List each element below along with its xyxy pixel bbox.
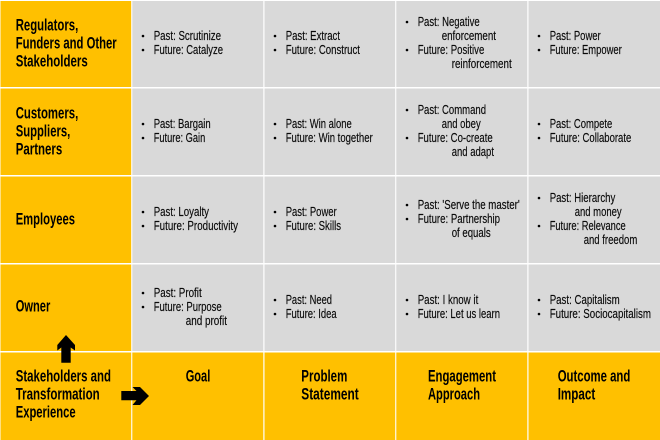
row header: customers: Customers, bbox=[16, 105, 78, 123]
cell: regulators goal bbox=[132, 1, 263, 87]
cell: regulators goal: Future: Catalyze bbox=[154, 42, 223, 57]
cell: employees problem statement: Future: Skills bbox=[286, 218, 341, 233]
cell: owner engagement bbox=[396, 264, 527, 351]
cell: regulators engagement: enforcement bbox=[442, 28, 496, 43]
cell: regulators goal: Past: Scrutinize bbox=[154, 28, 221, 43]
cell: employees outcome: Future: Relevance bbox=[550, 218, 626, 233]
row header: regulators: Regulators, bbox=[16, 17, 78, 35]
row header: regulators: Funders and Other bbox=[16, 35, 117, 53]
cell: owner engagement: Past: I know it bbox=[418, 292, 479, 307]
cell: employees outcome: and money bbox=[575, 204, 622, 219]
row header: employees: Employees bbox=[16, 211, 75, 229]
corner heading: stakeholders and transformation experience: Stakeholders and bbox=[16, 368, 111, 386]
cell: employees engagement bbox=[396, 176, 527, 263]
cell: customers engagement: and adapt bbox=[452, 144, 494, 159]
row header: regulators: Stakeholders bbox=[16, 53, 88, 71]
cell: customers problem statement: Past: Win alone bbox=[286, 116, 352, 131]
cell: customers goal bbox=[132, 88, 263, 175]
cell: regulators problem statement bbox=[264, 1, 395, 87]
cell: owner problem statement: Future: Idea bbox=[286, 306, 337, 321]
cell: employees outcome: Past: Hierarchy bbox=[550, 190, 616, 205]
cell: owner goal: Past: Profit bbox=[154, 285, 202, 300]
column heading: problem statement: Problem bbox=[301, 368, 347, 386]
column heading: outcome and impact bbox=[528, 352, 660, 440]
column heading: outcome and impact: Impact bbox=[558, 386, 596, 404]
cell: employees engagement: Past: 'Serve the master' bbox=[418, 197, 520, 212]
cell: customers problem statement: Future: Win together bbox=[286, 130, 373, 145]
cell: employees problem statement: Past: Power bbox=[286, 204, 337, 219]
cell: customers engagement: Future: Co-create bbox=[418, 130, 493, 145]
cell: employees outcome: and freedom bbox=[584, 232, 637, 247]
row header: customers bbox=[0, 88, 131, 175]
arrow: up bbox=[57, 335, 75, 363]
cell: customers goal: Future: Gain bbox=[154, 130, 205, 145]
cell: owner problem statement bbox=[264, 264, 395, 351]
cell: employees goal: Past: Loyalty bbox=[154, 204, 209, 219]
column heading: goal: Goal bbox=[186, 368, 210, 386]
cell: owner goal bbox=[132, 264, 263, 351]
cell: regulators outcome bbox=[528, 1, 660, 87]
cell: owner outcome bbox=[528, 264, 660, 351]
row header: regulators bbox=[0, 1, 131, 87]
cell: customers engagement bbox=[396, 88, 527, 175]
cell: owner engagement: Future: Let us learn bbox=[418, 306, 500, 321]
cell: customers outcome bbox=[528, 88, 660, 175]
cell: regulators outcome: Future: Empower bbox=[550, 42, 622, 57]
cell: owner goal: Future: Purpose bbox=[154, 299, 222, 314]
cell: owner goal: and profit bbox=[186, 313, 227, 328]
cell: regulators engagement bbox=[396, 1, 527, 87]
row header: customers: Suppliers, bbox=[16, 123, 70, 141]
cell: customers outcome: Future: Collaborate bbox=[550, 130, 631, 145]
cell: regulators problem statement: Past: Extract bbox=[286, 28, 340, 43]
row header: owner: Owner bbox=[16, 298, 51, 316]
arrow: right bbox=[121, 387, 149, 405]
cell: regulators engagement: Future: Positive bbox=[418, 42, 484, 57]
column heading: engagement approach bbox=[396, 352, 527, 440]
cell: employees engagement: Future: Partnership bbox=[418, 211, 500, 226]
cell: owner outcome: Past: Capitalism bbox=[550, 292, 620, 307]
row header: owner bbox=[0, 264, 131, 351]
cell: regulators engagement: reinforcement bbox=[452, 56, 512, 71]
cell: customers engagement: Past: Command bbox=[418, 102, 486, 117]
cell: customers problem statement bbox=[264, 88, 395, 175]
corner heading: stakeholders and transformation experience: Experience bbox=[16, 404, 76, 422]
cell: regulators outcome: Past: Power bbox=[550, 28, 601, 43]
row header: customers: Partners bbox=[16, 141, 62, 159]
row header: employees bbox=[0, 176, 131, 263]
cell: regulators engagement: Past: Negative bbox=[418, 14, 480, 29]
column heading: goal bbox=[132, 352, 263, 440]
cell: owner problem statement: Past: Need bbox=[286, 292, 332, 307]
corner heading: stakeholders and transformation experience bbox=[0, 352, 131, 440]
cell: employees goal bbox=[132, 176, 263, 263]
column heading: engagement approach: Approach bbox=[428, 386, 480, 404]
corner heading: stakeholders and transformation experience: Transformation bbox=[16, 386, 100, 404]
cell: employees outcome bbox=[528, 176, 660, 263]
cell: customers outcome: Past: Compete bbox=[550, 116, 612, 131]
column heading: problem statement bbox=[264, 352, 395, 440]
cell: employees engagement: of equals bbox=[452, 225, 491, 240]
cell: customers goal: Past: Bargain bbox=[154, 116, 211, 131]
cell: regulators problem statement: Future: Construct bbox=[286, 42, 360, 57]
column heading: engagement approach: Engagement bbox=[428, 368, 496, 386]
cell: employees problem statement bbox=[264, 176, 395, 263]
column heading: outcome and impact: Outcome and bbox=[558, 368, 630, 386]
column heading: problem statement: Statement bbox=[301, 386, 359, 404]
cell: customers engagement: and obey bbox=[442, 116, 481, 131]
cell: employees goal: Future: Productivity bbox=[154, 218, 238, 233]
